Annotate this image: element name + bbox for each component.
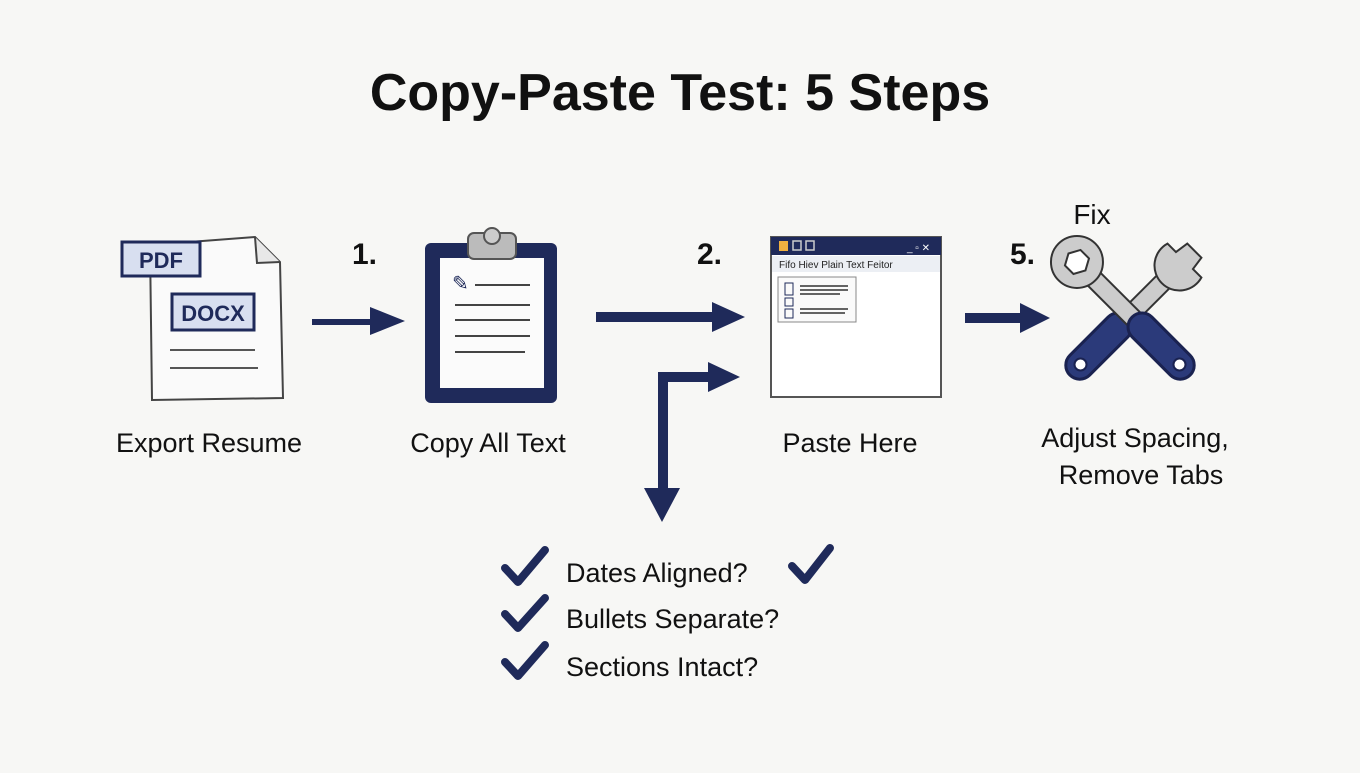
checklist: Dates Aligned? (566, 558, 748, 588)
title: Copy-Paste Test: 5 Steps (370, 64, 990, 122)
number 5: 5. (1010, 238, 1035, 271)
text: Remove Tabs (1059, 460, 1223, 490)
checklist: Sections Intact? (566, 652, 758, 682)
label: Paste Here: Paste Here (782, 428, 918, 458)
icon: plain text editor window (771, 237, 941, 397)
number 1: 1. (352, 238, 377, 271)
icon: plain text editor window: _ ▫ ✕ (906, 243, 930, 254)
arrow 1 (312, 307, 405, 335)
icon: clipboard: ✎ (452, 273, 469, 295)
label: Export Resume: Export Resume (116, 428, 302, 458)
checklist: Bullets Separate? (566, 604, 779, 634)
icon: documents PDF DOCX (122, 237, 283, 400)
label: Fix: Fix (1073, 199, 1111, 230)
label: Copy All Text: Copy All Text (410, 428, 566, 458)
arrow: branch down to checklist (644, 362, 740, 522)
icon: clipboard (425, 228, 557, 403)
icon: documents PDF DOCX: PDF (139, 248, 183, 273)
number 2: 2. (697, 238, 722, 271)
icon: documents PDF DOCX: DOCX (181, 301, 245, 326)
arrow 5 (965, 303, 1050, 333)
arrow 2 (596, 302, 745, 332)
icon: crossed wrenches (1040, 225, 1212, 393)
checklist (505, 548, 830, 682)
icon: plain text editor window: Fifo Hiev Plain Text Fеіtor (779, 260, 893, 271)
label: Adjust Spacing, Remove Tabs: Adjust Spacing, (1041, 423, 1229, 453)
